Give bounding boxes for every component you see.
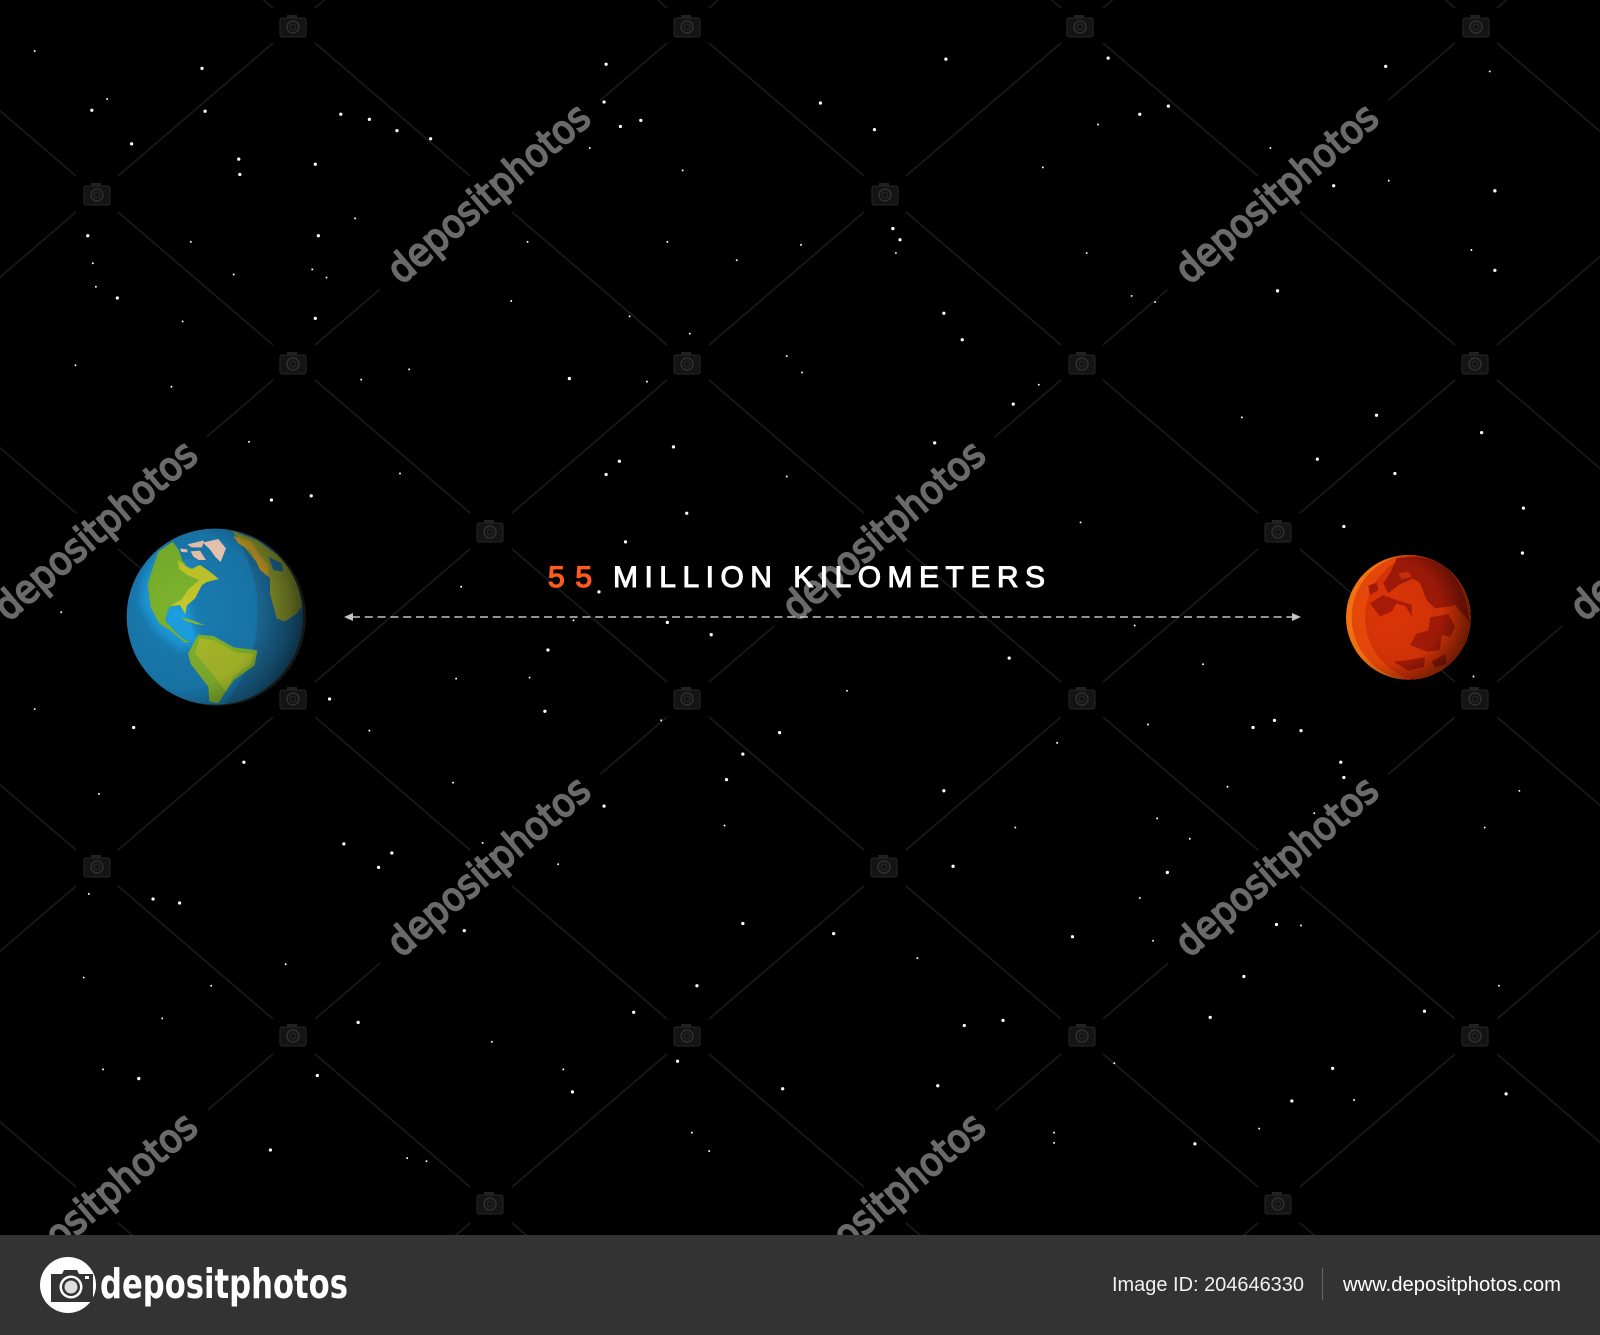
diagonal watermark texts: depositphotos	[774, 432, 994, 630]
Hudson Bay	[183, 559, 201, 569]
star field	[35, 51, 1523, 1161]
diagonal watermark texts: depositphotos	[1167, 95, 1387, 293]
Arctic islands	[180, 540, 206, 560]
diagonal watermark texts: depositphotos	[1167, 768, 1387, 966]
arrow: dashed double-headed distance line	[344, 613, 1301, 621]
ocean	[126, 528, 303, 705]
diagonal watermark texts: depositphotos	[379, 768, 599, 966]
Caribbean	[182, 617, 205, 625]
website: www.depositphotos.com	[1342, 1274, 1561, 1296]
Earth shadow rim	[129, 529, 306, 706]
icon: planet Mars	[1346, 555, 1471, 680]
diagonal watermark texts: depositphotos	[379, 95, 599, 293]
logo wordmark: depositphotos	[100, 1260, 348, 1308]
Mars surface	[1343, 553, 1477, 683]
label: million kilometers: MILLION KILOMETERS	[613, 561, 1045, 594]
shallow coastal glow	[140, 550, 203, 650]
Greenland	[203, 539, 226, 562]
diagonal watermark texts: depositphotos	[774, 1104, 994, 1302]
number: 55: 55	[548, 561, 592, 594]
footer band	[0, 1235, 1600, 1335]
shading	[127, 529, 303, 705]
watermark camera icons	[84, 15, 1489, 1214]
shading	[1346, 555, 1471, 680]
icon: planet Earth	[126, 528, 306, 706]
South America	[188, 635, 257, 703]
North America	[148, 542, 219, 643]
icon: camera logo	[40, 1257, 96, 1313]
Europe and Africa	[232, 531, 304, 622]
distance label	[548, 561, 1045, 594]
Mars dark maria	[1383, 557, 1469, 622]
image id: Image ID: 204646330	[1112, 1274, 1304, 1296]
